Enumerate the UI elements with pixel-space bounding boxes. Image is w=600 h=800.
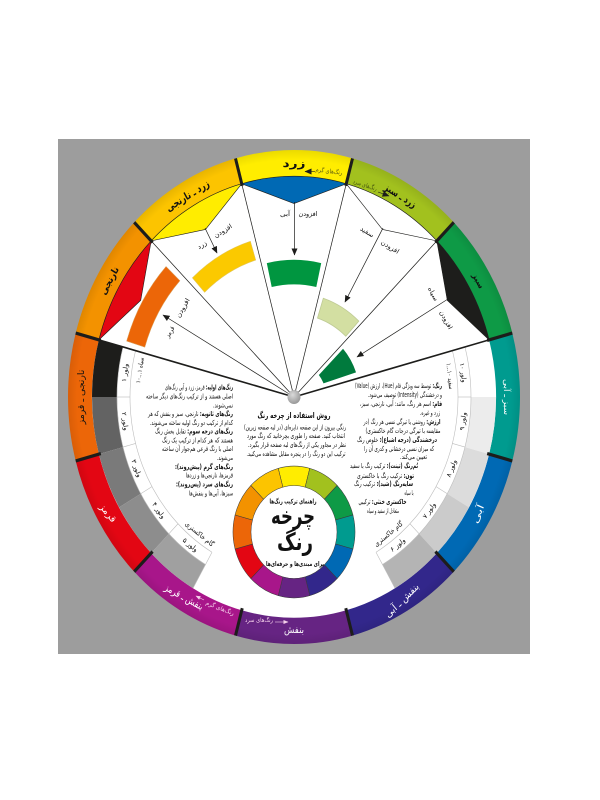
arrow: add white <box>345 225 401 302</box>
text block: colour types: قرمزها، نارنجی‌ها و زردها <box>186 472 233 480</box>
value labels: گام خاکستری <box>184 520 216 549</box>
text block: colour types: سبزها، آبی‌ها و بنفش‌ها <box>189 488 233 497</box>
text block: colour terms: و درخشندگی (Intensity) توصیف می‌شود. <box>368 390 442 399</box>
ring label: yellow: زرد <box>282 158 306 170</box>
ring label: red-violet: بنفش ـ قرمز <box>162 582 205 613</box>
text block: colour terms: خاکستری خنثی: ترکیبی <box>358 498 407 506</box>
arrow: add red: افزودن <box>174 297 192 319</box>
value labels: گام خاکستری <box>373 519 405 549</box>
text block: colour types: هستند که هر کدام از ترکیب یک رنگ <box>162 435 233 444</box>
text block: colour types: رنگ‌های درجه سوم: تقابل بخش رنگ <box>155 427 233 436</box>
arrow: add black: افزودن <box>438 309 454 331</box>
result swatch: orange <box>123 264 182 351</box>
window: yellow <box>148 177 251 258</box>
ring separators <box>76 158 512 636</box>
white disc <box>91 175 497 619</box>
grey value band <box>90 340 498 590</box>
cool colours note: violet: رنگ‌های سرد <box>245 616 273 624</box>
text block: colour types: نمی‌شوند. <box>213 401 233 409</box>
window: red <box>93 237 167 350</box>
ring label: blue: آبی <box>469 502 487 525</box>
text block: colour terms: درخشندگی (درجه اشباع): خلوص رنگ <box>357 435 437 444</box>
arrow: add black <box>357 286 454 357</box>
value label ring lines <box>117 347 471 588</box>
small wheel title: رنگ <box>277 528 313 556</box>
text block: colour terms: مقایسه با تیرگی درجات گام خاکستری) <box>366 426 441 435</box>
result swatch: green <box>267 260 321 287</box>
warm colours note: red-violet <box>196 596 235 617</box>
arrow: add blue <box>280 202 318 255</box>
arrow: add yellow <box>196 222 234 253</box>
arrow: add blue: افزودن <box>298 210 318 218</box>
warm colours note: yellow: رنگ‌های گرم <box>315 165 343 177</box>
value labels: ولور ۹ <box>458 412 468 431</box>
text block: colour types: رنگ‌های سرد (پس‌روند): <box>176 479 233 488</box>
window: blue <box>242 176 346 204</box>
result swatch: tint <box>314 296 360 339</box>
text block: how to use <box>244 422 346 458</box>
text block: how to use: نظر در مجاور یکی از رنگ‌های لبه صفحه قرار بگیرد. <box>248 440 346 449</box>
arrow: add white: سفید <box>359 225 375 239</box>
small wheel title: چرخه <box>271 502 315 530</box>
cool colours note: violet <box>245 616 288 624</box>
value labels: ولور ۳ <box>130 458 143 479</box>
result swatch: shade <box>315 348 357 391</box>
text block: colour types: می‌شوند. <box>217 454 233 462</box>
ring label: orange: نارنجی <box>99 265 122 297</box>
value labels: ولور ۱ <box>120 363 130 382</box>
value labels <box>120 356 468 554</box>
text block: colour terms <box>350 381 442 515</box>
ring label: blue-violet: بنفش ـ آبی <box>383 580 422 620</box>
heading: how to use: روش استفاده از چرخه رنگ <box>258 410 331 421</box>
ring label: violet: بنفش <box>284 625 304 636</box>
warm colours note: yellow <box>305 165 343 177</box>
text block: colour terms: تعیین می‌کند. <box>400 453 427 461</box>
small wheel title <box>271 502 315 556</box>
ring label: green: سبز <box>469 270 486 291</box>
colour wheel disc <box>68 150 520 644</box>
arrow: add white: افزودن <box>379 238 401 256</box>
ring label: yellow-green: زرد ـ سبز <box>382 181 418 211</box>
value labels: سیاه ۱...۱۰ <box>134 356 146 384</box>
text block: colour types: اصلی هستند و از ترکیب رنگ‌های دیگر ساخته <box>146 391 233 400</box>
centre hub <box>288 390 300 404</box>
wedge divider lines <box>99 184 489 397</box>
small wheel subtitle top: راهنمای ترکیب رنگ‌ها <box>270 498 317 506</box>
cool colours note: yellow-green: رنگ‌های سرد <box>352 177 378 193</box>
ring label: red-orange: نارنجی ـ قرمز <box>76 370 87 425</box>
result swatch: yellow-orange <box>190 238 259 295</box>
small colour wheel <box>233 466 355 598</box>
value labels: ولور ۴ <box>150 501 167 520</box>
text block: how to use: انتخاب کنید. صفحه را طوری بچرخانید که رنگ مورد <box>247 431 345 440</box>
value labels: ولور ۷ <box>421 501 438 520</box>
arrow: add yellow: زرد <box>196 239 208 251</box>
outer colour ring <box>68 150 520 644</box>
window: white <box>337 177 440 258</box>
value labels: سفید ۱۰...۱ <box>444 363 455 390</box>
text block: colour terms: ارزش: روشنی یا تیرگی نسبی هر رنگ (در <box>363 417 440 426</box>
text block: colour types <box>146 382 233 497</box>
text block: colour types: رنگ‌های گرم (پیش‌روند): <box>175 462 233 471</box>
warm colours note: red-violet: رنگ‌های گرم <box>205 599 235 617</box>
text block: colour terms: رنگ: توسط سه ویژگی فام (Hue)، ارزش (Value) <box>355 381 442 390</box>
text block: colour terms: با سیاه <box>404 489 414 497</box>
arrow: add red: قرمز <box>163 325 176 340</box>
text block: how to use: ترکیب این دو رنگ را در پنجره مقابل مشاهده می‌کنید. <box>246 449 346 458</box>
small wheel subtitle bottom: برای مبتدی‌ها و حرفه‌ای‌ها <box>266 560 324 568</box>
text block: colour types: رنگ‌های اولیه: قرمز، زرد و آبی رنگ‌های <box>165 382 233 392</box>
text block: colour terms: تون: ترکیب رنگ با خاکستری <box>357 471 414 480</box>
text block: how to use: رنگی بیرون از این صفحه دایره‌ای (در لبه صفحه زیرین) <box>244 422 346 431</box>
arrow: add yellow: افزودن <box>212 222 234 240</box>
text block: colour terms: که میزان نسبی درخشانی و کدری آن را <box>364 444 434 453</box>
text block: colour types: اصلی با رنگ فرعی هم‌جوار آن ساخته <box>162 444 233 453</box>
text block: colour terms: متعادل از سفید و سیاه <box>367 507 399 515</box>
text block: colour terms: تُم‌رنگ (تینت): ترکیب رنگ با سفید <box>350 461 418 470</box>
ring label: yellow-orange: زرد ـ نارنجی <box>164 177 211 215</box>
text block: colour types: کدام از ترکیب دو رنگ اولیه ساخته می‌شوند. <box>150 418 233 427</box>
arrow: add blue: آبی <box>280 209 291 218</box>
text block: colour terms: زرد و غیره. <box>420 409 440 417</box>
ring label: blue-green: سبز ـ آبی <box>502 379 513 415</box>
window: black <box>421 237 495 350</box>
arrow: add black: سیاه <box>426 286 440 302</box>
value labels: ولور ۵ <box>181 536 199 554</box>
arrow: add red <box>163 297 294 397</box>
value labels: ولور ۸ <box>445 458 458 479</box>
value labels: ولور ۱۰ <box>458 362 468 383</box>
text block: colour terms: سایه‌رنگ (شید): ترکیب رنگ <box>354 479 413 488</box>
text block: colour terms: فام: اسم هر رنگ، مانند: آبی، نارنجی، سبز، <box>360 399 442 408</box>
value labels: ولور ۲ <box>120 412 130 431</box>
value labels: ولور ۶ <box>389 536 407 554</box>
text block: colour types: رنگ‌های ثانویه: نارنجی، سبز و بنفش که هر <box>147 409 233 418</box>
ring label: red: قرمز <box>96 501 118 525</box>
grey background panel <box>58 139 530 654</box>
